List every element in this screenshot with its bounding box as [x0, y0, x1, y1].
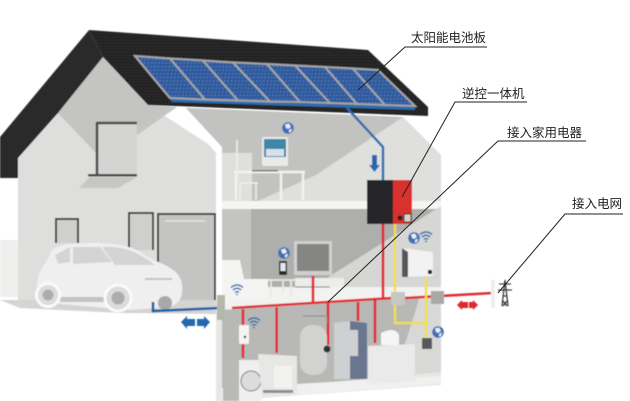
callout: inverter: 逆控一体机 — [462, 86, 525, 101]
water tank — [300, 316, 330, 375]
blue car charging cable — [153, 302, 220, 311]
icon: globe computer — [282, 122, 294, 134]
wall battery unit — [402, 248, 433, 277]
car windows — [55, 247, 155, 265]
lower room light — [310, 206, 441, 294]
red AC wiring — [232, 224, 493, 358]
charge wheel shadow — [158, 296, 172, 310]
sofa — [222, 260, 268, 300]
callout: solar panel: 太阳能电池板 — [411, 30, 487, 45]
lower room — [222, 209, 441, 294]
ground and shadows — [0, 240, 216, 314]
icon: wifi battery — [420, 232, 432, 242]
meter box — [422, 338, 432, 349]
car junction box — [217, 295, 228, 320]
lower windows — [56, 213, 215, 300]
roof gable band — [0, 30, 103, 178]
white cut edge — [177, 107, 222, 300]
grid connection plate — [491, 280, 495, 308]
arrows: car power flow — [181, 316, 210, 329]
house cutaway interior — [177, 107, 441, 401]
inverter — [367, 180, 412, 224]
basement light — [395, 296, 441, 376]
icon: globe TV — [278, 247, 290, 259]
icon: wifi sofa — [231, 285, 243, 295]
icon: globe meter — [432, 326, 444, 338]
basement — [222, 296, 441, 392]
yellow wiring — [395, 224, 426, 340]
basement floor — [222, 376, 441, 401]
roof tiles — [89, 30, 428, 116]
callout: grid — [498, 196, 623, 293]
junction box left — [391, 292, 405, 305]
car — [36, 243, 182, 311]
car body shadow — [60, 278, 172, 302]
boiler — [334, 321, 367, 379]
dryer — [258, 354, 297, 398]
icon: phone — [279, 261, 287, 275]
house exterior wall — [18, 57, 222, 300]
junction box right — [431, 291, 444, 304]
ceiling shadow — [186, 108, 403, 201]
front wheel — [105, 285, 131, 311]
shaded upper wall — [58, 57, 177, 153]
callout: appliances — [328, 125, 586, 302]
upper window — [79, 123, 137, 188]
icon: globe battery — [408, 232, 420, 244]
blue strip under panels — [170, 99, 415, 110]
callout: appliances: 接入家用电器 — [507, 125, 583, 140]
lower room side wall — [222, 209, 251, 287]
callout: solar panel — [358, 30, 487, 90]
washing machine — [223, 360, 262, 401]
upper room — [186, 108, 441, 201]
house illustration — [0, 30, 512, 401]
smart plug — [239, 325, 249, 344]
TV and sideboard — [294, 241, 344, 287]
lower floor — [222, 287, 441, 312]
rear wheel — [36, 284, 60, 306]
arrows: grid power flow — [457, 300, 478, 310]
low table — [267, 280, 295, 296]
upper floor slab — [222, 201, 441, 209]
heating unit — [368, 330, 415, 383]
icon: wifi plug — [248, 318, 260, 328]
solar panels — [135, 56, 415, 106]
callout: inverter — [402, 86, 527, 197]
icon: pylon — [498, 280, 512, 306]
blue DC line from panels — [347, 108, 383, 181]
desk and computer — [234, 137, 305, 200]
arrow: down — [369, 155, 380, 172]
callout: grid: 接入电网 — [572, 196, 622, 211]
